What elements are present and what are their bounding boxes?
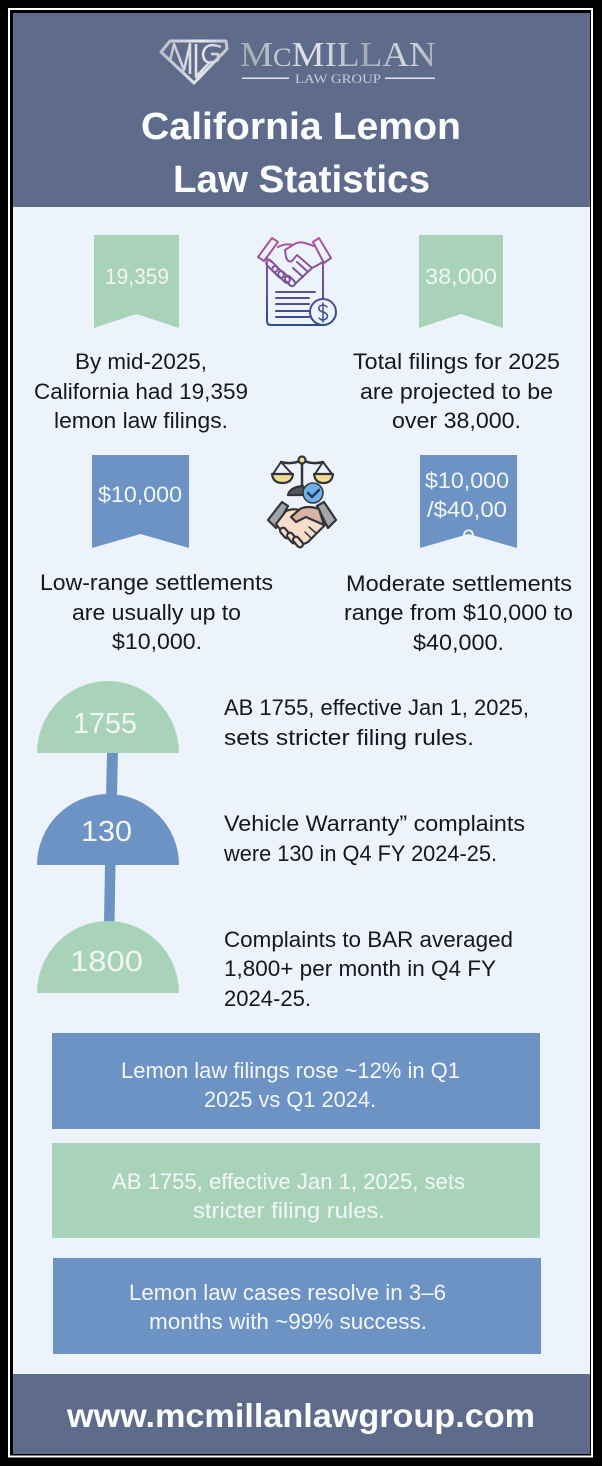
semicircle: 1800 [37,921,179,993]
text: low-range settlements: Low-range settlements [40,570,273,595]
handshake [268,502,336,549]
connector: 1755 to 130 [106,752,118,796]
logo [161,35,436,86]
text: AB 1755 [224,695,529,750]
text: moderate settlements: Moderate settlements [346,571,572,596]
text: projected filings: Total filings for 2025 [353,349,560,374]
callout box: AB 1755 [52,1143,540,1238]
icon: scales and handshake [268,456,336,549]
text: moderate settlements: range from $10,000 to [344,600,573,625]
icon: contract handshake [258,238,336,325]
stat ribbon: $10,000/$40,000 [420,455,517,550]
stat ribbon: $10,000/$40,000: $10,000 [425,468,509,493]
text: vehicle warranty [223,811,525,866]
logo diamond mark [161,41,227,83]
title: Law Statistics [173,159,430,201]
text: BAR complaints: 2024-25. [224,986,311,1011]
text: low-range settlements: are usually up to [72,600,241,625]
stat ribbon: 19,359 [94,235,179,328]
text: mid-2025 filings: California had 19,359 [34,379,248,404]
title: California Lemon [141,106,461,148]
text: vehicle warranty: were 130 in Q4 FY 2024-25. [223,841,497,866]
check badge [303,483,323,503]
scales [272,456,333,495]
stat ribbon: $10,000/$40,000: 0 [462,525,475,550]
callout box: AB 1755: AB 1755, effective Jan 1, 2025, sets [112,1169,465,1194]
text: BAR complaints [224,927,513,1011]
logo wordmark: MCMILLAN [240,35,436,74]
text: vehicle warranty: Vehicle Warranty” complaints [224,811,525,836]
text: projected filings: over 38,000. [392,408,521,433]
logo tagline: LAW GROUP [295,71,381,86]
callout box: filings rose: Lemon law filings rose ~12% in Q1 [121,1058,460,1083]
text: mid-2025 filings: lemon law filings. [54,408,228,433]
website url: www.mcmillanlawgroup.com [66,1397,535,1434]
text: low-range settlements: $10,000. [112,629,202,654]
stat ribbon: $10,000: $10,000 [98,482,182,507]
semicircle: 1755 [37,681,179,753]
text: mid-2025 filings [34,349,248,433]
semicircle: 130: 130 [81,816,132,848]
semicircle: 130 [37,794,179,865]
text: BAR complaints: Complaints to BAR averaged [224,927,513,952]
text: BAR complaints: 1,800+ per month in Q4 FY [224,956,496,981]
callout box: case resolution: Lemon law cases resolve in 3–6 [129,1280,446,1305]
text: AB 1755: AB 1755, effective Jan 1, 2025, [224,695,529,720]
connector: 130 to 1800 [104,864,116,923]
text: projected filings: are projected to be [360,379,553,404]
stat ribbon: $10,000/$40,000: /$40,00 [427,497,507,522]
text: projected filings [353,349,560,433]
text: mid-2025 filings: By mid-2025, [75,349,207,374]
stat ribbon: 38,000: 38,000 [425,264,497,289]
title [141,106,461,201]
callout box: filings rose [52,1033,540,1129]
semicircle: 1800: 1800 [70,946,143,978]
footer band [13,1374,590,1454]
callout box: case resolution: months with ~99% success. [149,1309,427,1334]
stat ribbon: 19,359: 19,359 [105,264,169,289]
callout box: filings rose: 2025 vs Q1 2024. [204,1087,376,1112]
callout box: case resolution [53,1258,541,1354]
text: AB 1755: sets stricter filing rules. [224,725,474,750]
stat ribbon: 38,000 [419,235,503,328]
stat ribbon: $10,000 [92,455,189,548]
callout box: AB 1755: stricter filing rules. [193,1198,385,1223]
text: moderate settlements [344,571,573,655]
text: moderate settlements: $40,000. [413,630,504,655]
semicircle: 1755: 1755 [73,708,137,740]
text: low-range settlements [40,570,273,654]
header band [13,13,590,207]
